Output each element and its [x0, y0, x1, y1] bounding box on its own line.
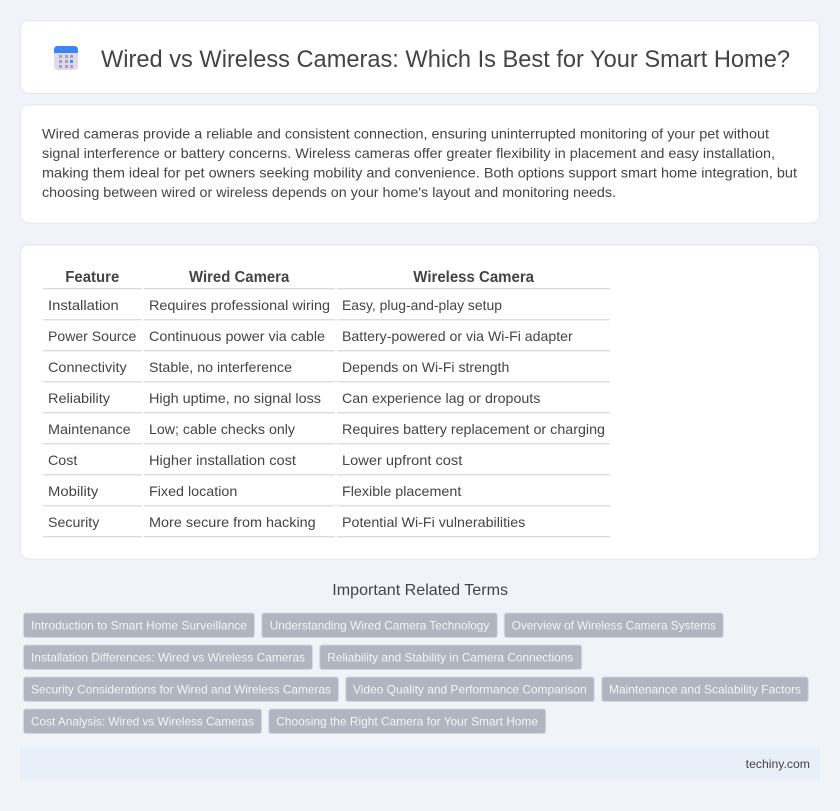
- panel: related term tags: [24, 613, 808, 734]
- tag: [24, 709, 262, 734]
- text block: introduction paragraph: making them ideal for pet owners seeking mobility and convenience. Both options support smart home integration, but: [42, 164, 797, 180]
- tag: [320, 645, 582, 670]
- text block: introduction paragraph: signal interference or battery concerns. Wireless cameras offer greater flexibility in placement and easy installation,: [42, 145, 775, 161]
- footer credit: techiny.com: [746, 757, 810, 771]
- table row: Reliability: Reliability: [48, 390, 110, 406]
- panel: comparison table: [20, 245, 820, 559]
- table row: Installation: Installation: [48, 297, 119, 313]
- table header row: [43, 269, 610, 289]
- tag: Choosing the Right Camera for Your Smart Home: [276, 714, 538, 728]
- footer: [20, 747, 820, 781]
- tag: [262, 613, 497, 638]
- tag: [602, 677, 808, 702]
- table row: Cost: Higher installation cost: [149, 452, 296, 468]
- heading: Important Related Terms: Important Related Terms: [332, 582, 508, 599]
- icon: calendar: [54, 46, 78, 70]
- table row: Power Source: Battery-powered or via Wi-Fi adapter: [342, 328, 573, 344]
- text block: introduction paragraph: [42, 126, 797, 200]
- table row: Security: Potential Wi-Fi vulnerabilities: [342, 514, 525, 530]
- tag: Introduction to Smart Home Surveillance: [31, 618, 247, 632]
- tag: Installation Differences: Wired vs Wireless Cameras: [31, 650, 305, 664]
- table row: Power Source: Power Source: [48, 328, 137, 344]
- panel: introduction text: [20, 105, 820, 223]
- table header row: Wireless Camera: [413, 269, 534, 286]
- table row: Maintenance: Requires battery replacement or charging: [342, 421, 605, 437]
- table row: Installation: [43, 297, 610, 320]
- table row: Power Source: Continuous power via cable: [149, 328, 325, 344]
- title: Wired vs Wireless Cameras: Which Is Best for Your Smart Home?: [101, 46, 790, 73]
- table row: Installation: Requires professional wiring: [149, 297, 330, 313]
- tag: Reliability and Stability in Camera Connections: [327, 650, 573, 664]
- tag: [346, 677, 594, 702]
- table row: Mobility: Flexible placement: [342, 483, 461, 499]
- table row: Connectivity: Depends on Wi-Fi strength: [342, 359, 509, 375]
- table row: Connectivity: [43, 359, 610, 382]
- table row: Mobility: [43, 483, 610, 506]
- tag: [24, 645, 312, 670]
- table row: Security: [43, 514, 610, 537]
- table row: Installation: Easy, plug-and-play setup: [342, 297, 502, 313]
- table row: Cost: [43, 452, 610, 475]
- table row: Reliability: Can experience lag or dropouts: [342, 390, 540, 406]
- tag: [24, 613, 254, 638]
- table row: Security: Security: [48, 514, 99, 530]
- table row: Maintenance: Low; cable checks only: [149, 421, 295, 437]
- table row: Mobility: Fixed location: [149, 483, 237, 499]
- tag: Security Considerations for Wired and Wireless Cameras: [31, 682, 331, 696]
- table row: Connectivity: Connectivity: [48, 359, 127, 375]
- text block: introduction paragraph: Wired cameras provide a reliable and consistent connection, ensuring uninterrupted monitoring of your pet without: [42, 126, 769, 142]
- table row: Maintenance: [43, 421, 610, 444]
- table header row: Wired Camera: [189, 269, 290, 286]
- table row: Reliability: High uptime, no signal loss: [149, 390, 321, 406]
- text block: introduction paragraph: choosing between wired or wireless depends on your home's layout and monitoring needs.: [42, 184, 616, 200]
- panel: title header: [20, 20, 820, 94]
- table row: Mobility: Mobility: [48, 483, 98, 499]
- table row: Power Source: [43, 328, 610, 351]
- tag: [269, 709, 546, 734]
- tag: [24, 677, 338, 702]
- table row: Maintenance: Maintenance: [48, 421, 131, 437]
- table row: Cost: Lower upfront cost: [342, 452, 462, 468]
- table header row: Feature: [65, 269, 120, 286]
- table row: Connectivity: Stable, no interference: [149, 359, 292, 375]
- tag: Cost Analysis: Wired vs Wireless Cameras: [31, 714, 254, 728]
- tag: Video Quality and Performance Comparison: [353, 682, 587, 696]
- tag: Maintenance and Scalability Factors: [609, 682, 801, 696]
- table row: Reliability: [43, 390, 610, 413]
- tag: [504, 613, 723, 638]
- tag: Overview of Wireless Camera Systems: [512, 618, 716, 632]
- table row: Cost: Cost: [48, 452, 77, 468]
- tag: Understanding Wired Camera Technology: [270, 618, 489, 632]
- table row: Security: More secure from hacking: [149, 514, 316, 530]
